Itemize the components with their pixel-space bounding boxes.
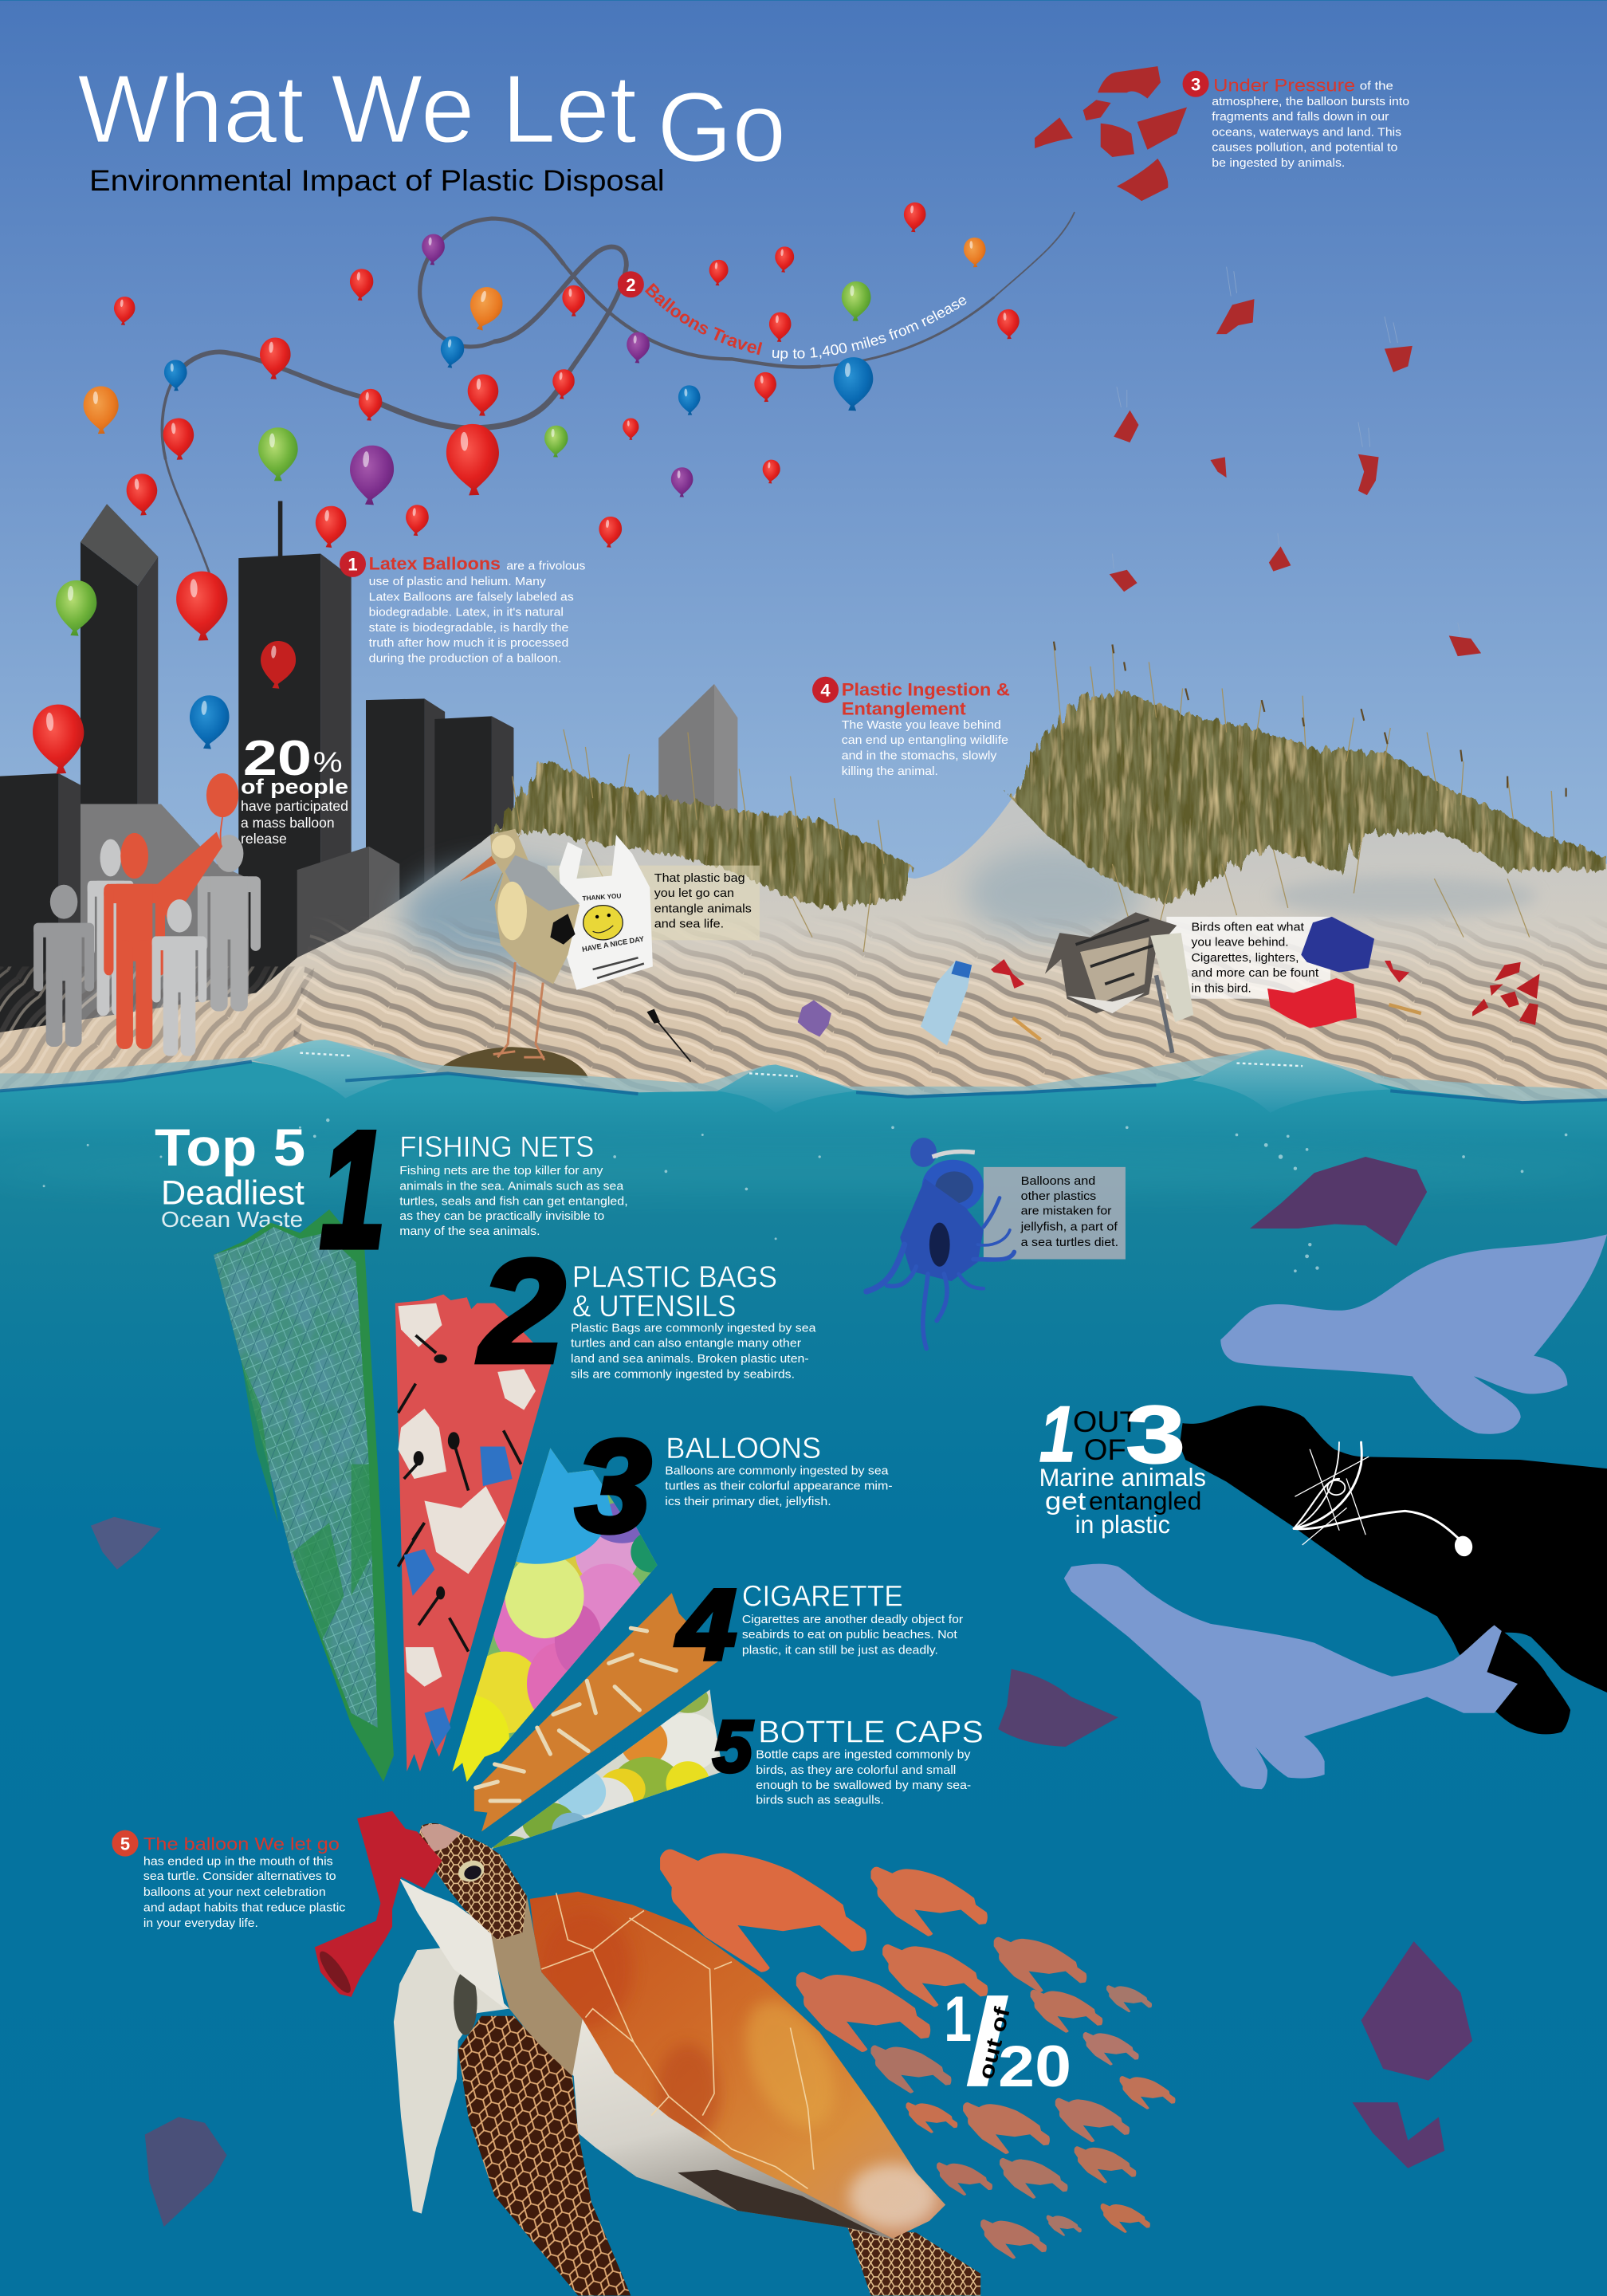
- plastic bag: THANK YOU: [582, 892, 622, 902]
- net float: [1452, 1534, 1475, 1559]
- tall left tower: [81, 504, 158, 835]
- lighter: [1150, 933, 1193, 1022]
- red bow scrap: [991, 959, 1024, 989]
- grey person right: [198, 835, 261, 1011]
- callout 5: the balloon we let go: The balloon We let go: [143, 1834, 340, 1854]
- badge 1: 1: [348, 555, 358, 575]
- title: Go: [657, 72, 786, 183]
- seal: upper: [1220, 1234, 1607, 1434]
- callout 1: latex balloons: biodegradable. Latex, in it's natural: [369, 606, 564, 619]
- stat: 1 out of 3: [1039, 1389, 1206, 1539]
- cigarette butts: [476, 1628, 676, 1801]
- callout 1: latex balloons: truth after how much it is processed: [369, 636, 568, 650]
- callout 1: latex balloons: during the production of a balloon.: [369, 651, 561, 665]
- callout 1: latex balloons: Latex Balloons are falsely labeled as: [369, 590, 574, 603]
- wedge 4: cigarettes: [474, 1593, 721, 1831]
- badge 2: 2: [626, 275, 635, 295]
- stat: 1 out of 20: 1: [944, 1983, 972, 2055]
- red scrap small: [1385, 961, 1409, 983]
- belly dark band: [678, 2170, 878, 2234]
- red burst balloon: [1267, 978, 1357, 1028]
- white bags: [398, 1303, 536, 1687]
- sea turtle: [394, 1823, 980, 2295]
- crest foam: [300, 1053, 1302, 1076]
- note box: plastic bag: [548, 866, 760, 940]
- section 2 text: & UTENSILS: [572, 1289, 737, 1323]
- stat: 1 out of 3: Marine animals: [1039, 1464, 1206, 1492]
- head: [492, 835, 515, 858]
- section 4 text: [742, 1580, 963, 1657]
- section 3 text: ics their primary diet, jellyfish.: [665, 1495, 831, 1508]
- section 5 text: birds, as they are colorful and small: [756, 1763, 956, 1777]
- slash band: [967, 1995, 1008, 2086]
- wedge 1: fishing nets: [214, 1209, 394, 1782]
- wave crest highlight: [252, 1040, 1390, 1113]
- note text: jellyfish: a sea turtles diet.: [1021, 1236, 1118, 1249]
- section 4 text: CIGARETTE: [742, 1580, 903, 1613]
- note text: plastic bag: entangle animals: [654, 902, 752, 915]
- cigarette butt: [1389, 1005, 1421, 1013]
- skyline buildings: [0, 501, 737, 1054]
- rear flipper: [847, 2227, 980, 2295]
- callout 2: balloons travel on curve: Balloons Travel: [645, 282, 762, 356]
- red person's balloon: [206, 773, 238, 847]
- callout 1: latex balloons: [340, 551, 585, 665]
- callout 4: plastic ingestion: can end up entangling wildlife: [842, 733, 1008, 747]
- school of orange turtles: [660, 1850, 1176, 2259]
- legs: [493, 962, 544, 1060]
- shell shading: [539, 1911, 937, 2228]
- section 1 text: many of the sea animals.: [399, 1225, 540, 1238]
- callout 2: balloons travel on curve: up to 1,400 miles from release: [772, 297, 966, 362]
- wing: [505, 855, 580, 911]
- callout 4: plastic ingestion: The Waste you leave behind: [842, 718, 1001, 732]
- note text: bird: [1192, 920, 1319, 995]
- fragment motion lines: [1112, 267, 1460, 635]
- purple plastic on sand: [798, 1001, 831, 1036]
- stat: 1 out of 3: in plastic: [1075, 1511, 1170, 1539]
- number 4: 4: [675, 1570, 737, 1681]
- ocean: [0, 1040, 1607, 2295]
- note text: bird: you leave behind.: [1192, 936, 1289, 949]
- grass blades: [490, 644, 1554, 952]
- left white flipper: [394, 1947, 509, 2214]
- belly: [509, 2006, 896, 2240]
- section 2 text: land and sea animals. Broken plastic uten-: [571, 1352, 809, 1366]
- eye: [455, 1857, 487, 1885]
- note text: jellyfish: jellyfish, a part of: [1020, 1221, 1118, 1234]
- sand ripples: [0, 922, 1607, 1100]
- section 3 text: Balloons are commonly ingested by sea: [665, 1464, 889, 1477]
- mid tower: [366, 698, 445, 996]
- breast highlight: [497, 882, 527, 940]
- section 3 text: BALLOONS: [666, 1432, 821, 1464]
- front left block: [0, 773, 81, 1054]
- oat seed heads: [1054, 642, 1566, 796]
- neck: [483, 1855, 583, 2076]
- section 5 text: birds such as seagulls.: [756, 1794, 884, 1807]
- callout 2: balloons travel on curve: [617, 271, 966, 362]
- people figures: [33, 773, 261, 1056]
- callout 4: plastic ingestion: killing the animal.: [842, 765, 938, 778]
- note text: bird: in this bird.: [1192, 981, 1251, 995]
- note text: plastic bag: That plastic bag: [654, 871, 745, 885]
- badge 2: [618, 271, 644, 297]
- shimmer band: [0, 1145, 1607, 1197]
- plastic bag: HAVE A NICE DAY: [581, 934, 645, 953]
- section 1 text: animals in the sea. Animals such as sea: [399, 1179, 624, 1193]
- title: [77, 55, 786, 183]
- front person: [152, 899, 206, 1056]
- sand: [0, 728, 1607, 1127]
- callout 5: the balloon we let go: and adapt habits that reduce plastic: [143, 1901, 346, 1915]
- body: [490, 829, 580, 984]
- stat: 1 out of 20: out of: [973, 2003, 1015, 2082]
- callout 5: the balloon we let go: balloons at your next celebration: [143, 1885, 326, 1899]
- callout 1: latex balloons: Latex Balloons: [369, 554, 501, 574]
- section 4 text: seabirds to eat on public beaches. Not: [742, 1628, 958, 1641]
- heading: top 5 deadliest ocean waste: Deadliest: [161, 1174, 305, 1212]
- net on seal: [1294, 1442, 1460, 1545]
- badge 4: 4: [820, 681, 831, 701]
- badge 3: 3: [1191, 74, 1200, 94]
- red fragments on sand: [1472, 962, 1540, 1025]
- stat: 1 out of 3: OUT: [1073, 1406, 1138, 1438]
- balloon opening: [315, 1948, 356, 1997]
- callout 5: the balloon we let go: sea turtle. Consider alternatives to: [143, 1869, 336, 1883]
- note text: bird: Birds often eat what: [1192, 920, 1305, 934]
- grass left: [492, 761, 912, 908]
- rock mound: [432, 1047, 588, 1078]
- callout 5: the balloon we let go: has ended up in the mouth of this: [143, 1855, 333, 1869]
- left person: [33, 885, 94, 1047]
- dunes and beach: [0, 642, 1607, 1127]
- head: [417, 1823, 527, 1940]
- section 5 text: BOTTLE CAPS: [758, 1715, 984, 1749]
- callout 5: the balloon we let go: [112, 1830, 346, 1930]
- bottle: [921, 961, 972, 1045]
- seal: lower: [1064, 1564, 1518, 1789]
- black utensils: [398, 1335, 521, 1652]
- grass right: [1008, 691, 1607, 901]
- callout 3: under pressure: oceans, waterways and land. This: [1212, 125, 1401, 139]
- stat: 20 percent: [241, 730, 348, 847]
- section 4 text: Cigarettes are another deadly object for: [742, 1613, 963, 1626]
- number 5: 5: [713, 1706, 754, 1787]
- purple plastic shapes: [91, 1157, 1472, 2227]
- note text: plastic bag: you let go can: [654, 887, 734, 900]
- callout 4: plastic ingestion: Plastic Ingestion &: [842, 680, 1010, 700]
- stat: 1 out of 3: 1: [1039, 1390, 1076, 1479]
- callout 4: plastic ingestion: [812, 677, 1010, 778]
- callout 1: latex balloons: state is biodegradable, is hardly the: [369, 621, 568, 635]
- mid tower 2: [434, 716, 513, 938]
- note box: jellyfish: [984, 1167, 1126, 1260]
- stat: 20 percent: release: [241, 831, 287, 847]
- section 3 text: [665, 1432, 893, 1508]
- section 5 text: [756, 1715, 984, 1807]
- front flipper: [458, 2016, 631, 2295]
- stat: 20 percent: 20: [243, 730, 312, 786]
- far grey tower: [658, 684, 737, 835]
- dune shading right: [1273, 875, 1537, 917]
- section 2 text: sils are commonly ingested by seabirds.: [571, 1367, 795, 1381]
- shell seams: [541, 1893, 814, 2188]
- section 5 text: enough to be swallowed by many sea-: [756, 1779, 971, 1792]
- section 2 text: turtles and can also entangle many other: [571, 1337, 801, 1350]
- antenna tower: [238, 501, 352, 1025]
- section 5 text: Bottle caps are ingested commonly by: [756, 1748, 971, 1762]
- black patch: [550, 914, 576, 945]
- callout 3: under pressure: be ingested by animals.: [1212, 156, 1345, 170]
- subtitle: Environmental Impact of Plastic Disposal: [89, 164, 665, 197]
- section 3 text: turtles as their colorful appearance mim-: [665, 1480, 893, 1493]
- fork: [647, 1009, 691, 1062]
- callout 3: under pressure: [1183, 71, 1409, 170]
- note text: jellyfish: other plastics: [1021, 1189, 1096, 1203]
- section 1 text: turtles, seals and fish can get entangled,: [399, 1195, 628, 1209]
- section 2 text: Plastic Bags are commonly ingested by sea: [571, 1322, 816, 1335]
- cigarette: [1013, 1018, 1040, 1040]
- number 3: 3: [576, 1413, 651, 1560]
- callout 1: latex balloons: are a frivolous: [506, 560, 585, 573]
- water lip over sand: [0, 1040, 1607, 1113]
- bottle cap: [1301, 917, 1374, 973]
- head pink tip: [420, 1824, 461, 1852]
- note text: bird: Cigarettes, lighters,: [1192, 951, 1299, 965]
- heading: top 5 deadliest ocean waste: Top 5: [155, 1119, 305, 1177]
- stat: 1 out of 3: entangled: [1089, 1488, 1201, 1516]
- badge 4: [812, 677, 839, 703]
- callout 3: under pressure: Under Pressure: [1213, 75, 1355, 95]
- title: What We Let: [77, 55, 637, 163]
- callout 1: latex balloons: use of plastic and helium. Many: [369, 575, 546, 588]
- sky background: [0, 1, 1607, 1113]
- wedge 3: balloons: [452, 1448, 657, 1782]
- number 2: 2: [477, 1229, 565, 1393]
- red person raising arm: [104, 832, 222, 1049]
- stat: 1 out of 20: [944, 1983, 1071, 2099]
- green patches: [242, 1362, 373, 1640]
- callout 4: plastic ingestion: Entanglement: [842, 699, 967, 719]
- blue bags: [404, 1447, 513, 1750]
- dark water line: [0, 1062, 1607, 1103]
- water body: [0, 1062, 1607, 2295]
- stat: 1 out of 3: 3: [1126, 1389, 1185, 1480]
- stat: 1 out of 3: get: [1045, 1488, 1086, 1516]
- section 1 text: as they can be practically invisible to: [399, 1209, 604, 1223]
- low grey block: [297, 847, 399, 981]
- section 2 text: [571, 1260, 816, 1381]
- callout 3: under pressure: causes pollution, and potential to: [1212, 141, 1397, 155]
- grey person behind: [88, 839, 134, 1016]
- section 2 text: PLASTIC BAGS: [572, 1260, 777, 1293]
- note text: jellyfish: are mistaken for: [1021, 1205, 1111, 1218]
- note text: bird: and more can be fount: [1192, 966, 1319, 980]
- badge 1: [340, 551, 366, 577]
- section 1 text: [399, 1130, 628, 1238]
- stat: 1 out of 20: 20: [998, 2034, 1071, 2099]
- heading: top 5 deadliest ocean waste: [155, 1119, 305, 1232]
- shell: [530, 1892, 945, 2239]
- seal: black entangled: [1180, 1406, 1607, 1734]
- badge 5: [112, 1830, 139, 1857]
- stat: 20 percent: have participated: [241, 798, 348, 814]
- throat: [399, 1878, 505, 2009]
- flipper shadow: [454, 1971, 477, 2035]
- balloon in turtle mouth: [315, 1811, 442, 1997]
- plastic bag: [559, 835, 653, 990]
- stepped grey block: [81, 804, 249, 1054]
- note text: jellyfish: [1020, 1174, 1118, 1249]
- dune shading centre: [966, 847, 1141, 940]
- dead bird: [1045, 912, 1177, 1053]
- burst balloon fragments: [1035, 66, 1481, 656]
- callout 3: under pressure: fragments and falls down in our: [1212, 110, 1389, 124]
- stat: 1 out of 3: OF: [1084, 1433, 1126, 1466]
- badge 3: [1183, 71, 1209, 97]
- stork bird: [460, 829, 580, 1060]
- note text: jellyfish: Balloons and: [1021, 1174, 1095, 1188]
- callout 5: the balloon we let go: in your everyday life.: [143, 1917, 258, 1930]
- balloons: [31, 202, 1020, 776]
- badge 5: 5: [120, 1834, 130, 1854]
- wedge 2: plastic bags and utensils: [395, 1295, 552, 1771]
- number 1: 1: [320, 1098, 385, 1281]
- bubbles: [43, 1119, 1567, 1272]
- heading: top 5 deadliest ocean waste: Ocean Waste: [161, 1207, 303, 1232]
- wedge 5: bottle caps: [491, 1689, 721, 1849]
- callout 3: under pressure: atmosphere, the balloon bursts into: [1212, 95, 1409, 108]
- section 1 text: FISHING NETS: [399, 1130, 594, 1163]
- section 1 text: Fishing nets are the top killer for any: [399, 1164, 603, 1177]
- callout 4: plastic ingestion: and in the stomachs, slowly: [842, 749, 997, 763]
- blue plastic jellyfish: [866, 1138, 1014, 1349]
- stat: 20 percent: a mass balloon: [241, 815, 335, 831]
- section 4 text: plastic, it can still be just as deadly.: [742, 1643, 938, 1657]
- note text: plastic bag: and sea life.: [654, 918, 724, 931]
- dune shading left: [403, 864, 607, 966]
- rope path: [162, 213, 1075, 572]
- stat: 20 percent: of people: [241, 776, 348, 799]
- callout 3: under pressure: of the: [1360, 80, 1393, 93]
- stat: 20 percent: %: [313, 747, 343, 778]
- beak: [460, 852, 501, 882]
- note box: bird: [1166, 917, 1330, 999]
- note text: plastic bag: [654, 871, 752, 931]
